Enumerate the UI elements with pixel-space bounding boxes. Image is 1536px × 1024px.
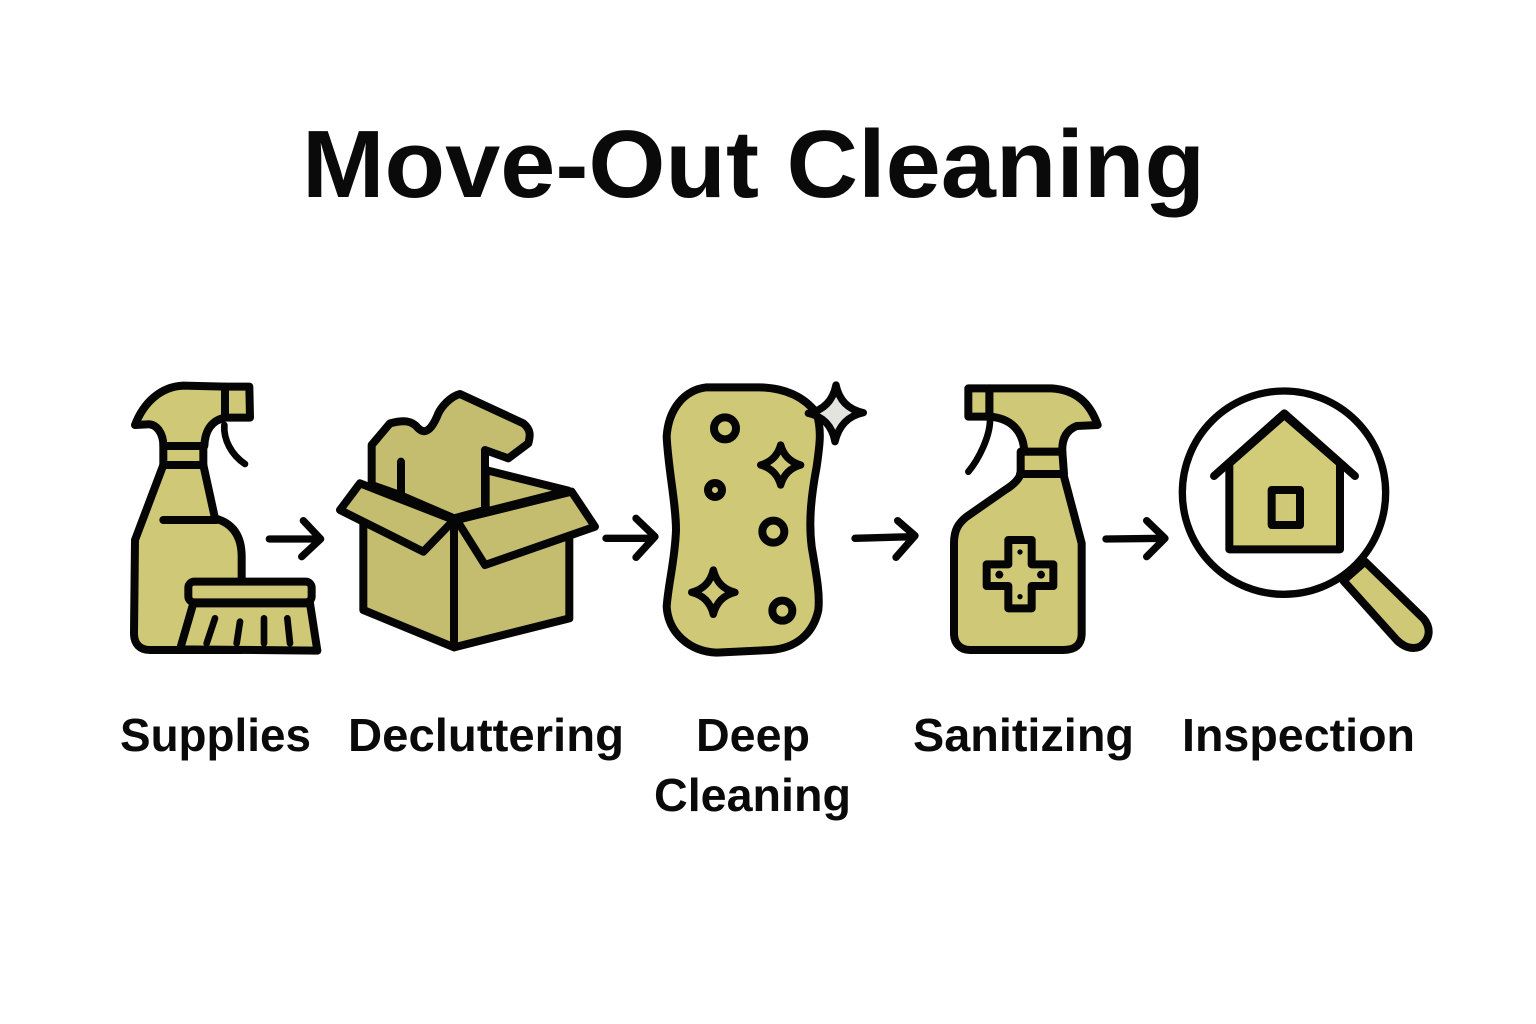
box left face [363, 520, 454, 647]
sponge body [667, 387, 820, 653]
label: deep cleaning [654, 709, 851, 821]
arrow: decluttering to deep cleaning [606, 518, 655, 557]
label: sanitizing: Sanitizing [913, 709, 1134, 761]
icon: sponge with sparkles [667, 385, 863, 653]
icon: magnifying glass over house [1182, 391, 1429, 648]
outer sparkle [808, 385, 863, 442]
left flap [340, 483, 454, 552]
arrow: deep cleaning to sanitizing [855, 521, 915, 557]
icon: open box with shirt [340, 394, 595, 647]
collar [1021, 452, 1064, 474]
sponge pores [708, 417, 792, 621]
title: Move-Out Cleaning [302, 111, 1205, 218]
house roof [1214, 413, 1355, 476]
nozzle [968, 388, 989, 417]
collar [163, 446, 203, 465]
cross dots [995, 549, 1045, 599]
nozzle [225, 387, 250, 418]
icon: sanitizer spray bottle [954, 388, 1098, 650]
right flap [457, 492, 595, 565]
icon: spray bottle and brush [134, 386, 317, 651]
magnifier lens [1182, 391, 1386, 594]
brush handle [188, 582, 312, 602]
bottle body [134, 465, 242, 650]
label: deep cleaning: Cleaning [654, 769, 851, 821]
label: decluttering: Decluttering [348, 709, 624, 761]
spray head [135, 386, 225, 446]
house window [1272, 490, 1300, 525]
label: deep cleaning: Deep [696, 709, 810, 761]
label: inspection: Inspection [1182, 709, 1415, 761]
arrow: supplies to decluttering [269, 521, 321, 557]
spray head [989, 388, 1098, 452]
trigger tube [224, 425, 245, 464]
trigger tube [968, 420, 990, 472]
brush bristle lines [207, 618, 290, 643]
magnifier handle [1343, 562, 1429, 648]
sponge star upper [761, 445, 801, 485]
back flap [486, 470, 568, 512]
sponge star lower [692, 570, 735, 614]
shoulder line [163, 508, 217, 532]
box right face [454, 520, 569, 647]
shirt sleeve line [389, 462, 413, 495]
label: supplies: Supplies [120, 709, 311, 761]
shirt [372, 394, 530, 518]
house body [1229, 415, 1340, 549]
arrow: sanitizing to inspection [1106, 521, 1165, 557]
medical cross [987, 540, 1053, 608]
bottle body [954, 474, 1082, 650]
brush bristles [180, 603, 317, 651]
